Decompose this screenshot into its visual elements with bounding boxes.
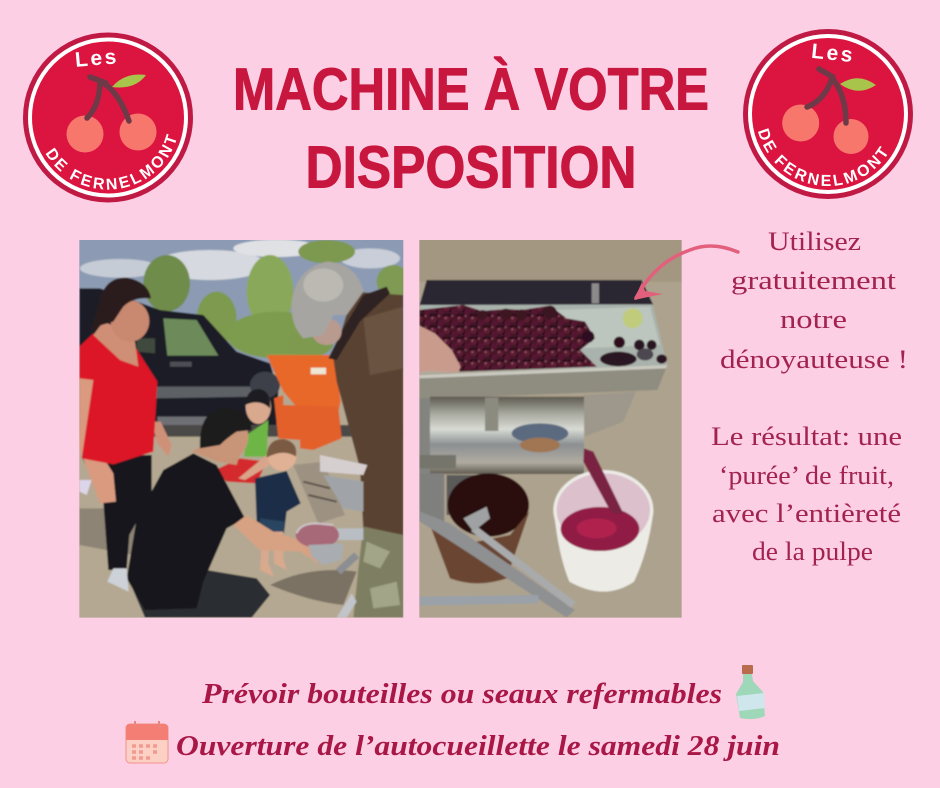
text: bring bottles or buckets: Prévoir bouteilles ou seaux refermables — [201, 678, 722, 710]
text: result description: avec l’entièreté — [712, 498, 901, 528]
icon: calendar — [126, 721, 168, 763]
text: opening date: Ouverture de l’autocueillette le samedi 28 juin — [176, 730, 780, 762]
text: result description: ‘purée’ de fruit, — [719, 460, 894, 490]
icon: bottle — [736, 665, 765, 719]
logo: left cherry badge: DE FERNELMONT — [46, 134, 176, 190]
text: free pitting machine — [720, 226, 908, 374]
text: result description: de la pulpe — [752, 536, 873, 566]
logo: right cherry badge: Les — [810, 40, 856, 67]
title: MACHINE À VOTRE — [233, 56, 709, 122]
photo: family using the machine — [77, 238, 410, 620]
text: result description — [711, 421, 902, 566]
logo: right cherry badge — [743, 29, 913, 199]
text: free pitting machine: notre — [780, 304, 847, 334]
text: result description: Le résultat: une — [711, 421, 902, 451]
logo: left cherry badge: Les — [74, 45, 120, 72]
text: free pitting machine: dénoyauteuse ! — [720, 344, 908, 374]
title — [233, 56, 709, 200]
text: free pitting machine: Utilisez — [768, 226, 861, 256]
arrow pointing to the hopper — [634, 246, 738, 300]
text: free pitting machine: gratuitement — [731, 265, 897, 295]
logo: right cherry badge: DE FERNELMONT — [758, 128, 888, 186]
photo: cherry pitting machine and bucket of purée — [417, 238, 683, 620]
title: DISPOSITION — [306, 134, 636, 200]
logo: left cherry badge — [23, 32, 193, 202]
